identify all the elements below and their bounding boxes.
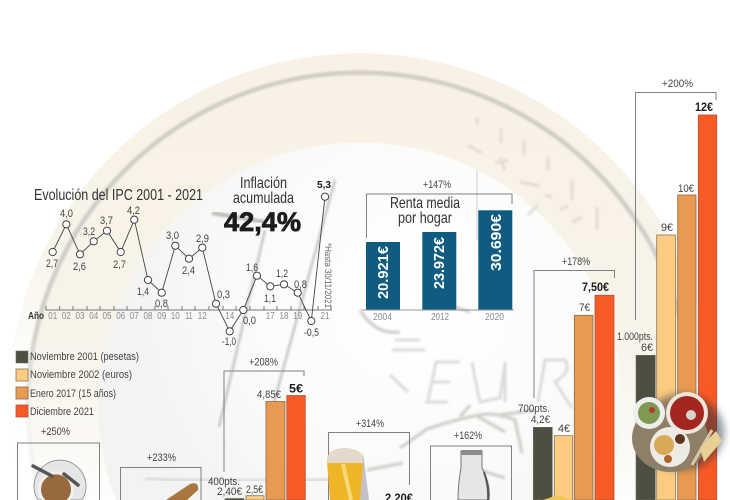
line chart: IPC: 1,1 [264, 293, 276, 305]
panel: bread [120, 452, 201, 500]
line chart: IPC [28, 179, 333, 348]
legend: Diciembre 2021 [30, 406, 94, 418]
panel: +178%: 4€ [558, 423, 570, 435]
coin engraving: EUR lettering [390, 340, 572, 408]
panel: milk bottle [430, 430, 512, 500]
panel: menu +208%: 400pts. [208, 476, 240, 488]
bar chart: Renta media por hogar: 20.921€ [376, 246, 392, 299]
line chart: IPC: *Hasta 30/11/2021 [322, 243, 333, 308]
line chart: IPC: 3,7 [100, 215, 113, 227]
bar chart: Renta media por hogar: por hogar [398, 210, 453, 227]
line chart: IPC: 07 [130, 311, 139, 322]
panel: +200%: 6€ [641, 342, 653, 354]
line chart: IPC: 2,6 [73, 261, 86, 273]
bar chart: Renta media por hogar: 2004 [373, 312, 392, 323]
line chart: IPC: 4,0 [60, 208, 73, 220]
line chart: IPC: 12 [198, 311, 207, 322]
line chart: IPC: 18 [280, 311, 289, 322]
line chart: IPC: 17 [266, 311, 275, 322]
panel: +200%: 9€ [661, 222, 673, 234]
line chart: IPC: 09 [157, 311, 167, 322]
bar chart: Renta media por hogar [362, 179, 514, 323]
heading: Evolución del IPC: Evolución del IPC 2001 - 2021 [34, 187, 203, 204]
panel: +178%: 4,2€ [531, 414, 550, 426]
panel: menu +208% [208, 356, 305, 500]
line chart: IPC: 21 [320, 311, 330, 322]
bar chart: Renta media por hogar: 2020 [485, 312, 504, 323]
line chart: IPC: 1,2 [276, 268, 288, 280]
panel: +178%: 7€ [579, 302, 590, 314]
icon: bottle [458, 450, 489, 500]
panel: bread: +233% [147, 452, 176, 464]
line chart: IPC: 14 [225, 311, 235, 322]
legend [16, 351, 139, 418]
line chart: IPC: 06 [116, 311, 126, 322]
legend: Noviembre 2001 (pesetas) [30, 351, 139, 363]
panel: +200%: 10€ [678, 183, 694, 195]
line chart: IPC: 2,4 [182, 265, 195, 277]
icon: cheese [543, 495, 573, 500]
line chart: IPC: 19 [293, 311, 303, 322]
line chart: IPC: 01 [48, 311, 58, 322]
panel: menu +208%: +208% [249, 356, 278, 368]
panel: coffee: +250% [41, 426, 70, 438]
line chart: IPC: -1,0 [222, 336, 236, 348]
line chart: IPC: 2,9 [196, 233, 209, 245]
line chart: IPC: 1,6 [246, 262, 258, 274]
panel: menu +208%: 4,85€ [257, 389, 281, 401]
coin engraving: map [360, 302, 535, 478]
panel: +178%: +178% [562, 256, 590, 268]
icon: plate of food [632, 392, 724, 472]
bar chart: Renta media por hogar: Renta media [390, 195, 460, 212]
line chart: IPC: 04 [89, 311, 99, 322]
line chart: IPC: 2,7 [46, 258, 58, 270]
line chart: IPC: 05 [102, 311, 112, 322]
panel: +200% [617, 78, 724, 500]
text block: Inflación acumulada: Inflación [240, 175, 287, 192]
panel: menu +208%: 5€ [289, 382, 303, 396]
line chart: IPC: 2,7 [113, 259, 126, 271]
panel: coffee [18, 426, 100, 500]
line chart: IPC: 10 [171, 311, 180, 322]
panel: menu +208%: 2,40€ [217, 486, 242, 498]
panel: +200%: 12€ [695, 100, 713, 114]
bar chart: Renta media por hogar: +147% [423, 179, 451, 191]
line chart: IPC: 0,3 [217, 289, 230, 301]
line chart: IPC: -0,5 [304, 327, 319, 339]
icon: baguette [166, 483, 198, 500]
bar chart: Renta media por hogar: 23.972€ [432, 237, 448, 289]
line chart: IPC: 0,8 [155, 298, 168, 310]
panel: +178%: 7,50€ [582, 280, 609, 294]
line chart: IPC: 5,3 [317, 179, 331, 191]
line chart: IPC: 4,2 [127, 205, 140, 217]
text block: Inflación acumulada: acumulada [233, 190, 294, 207]
legend: Enero 2017 (15 años) [30, 388, 116, 400]
panel: beer [327, 418, 413, 500]
bar chart: Renta media por hogar: 30.690€ [489, 214, 505, 271]
line chart: IPC: 1,4 [137, 286, 149, 298]
panel: +178% [518, 256, 614, 500]
panel: beer: +314% [356, 418, 384, 430]
icon: coffee cup [33, 460, 86, 500]
line chart: IPC: Año [28, 310, 44, 322]
line chart: IPC: 03 [76, 311, 85, 322]
icon: beer glass [327, 448, 369, 500]
legend: Noviembre 2002 (euros) [30, 369, 132, 381]
line chart: IPC: 0,8 [294, 279, 307, 291]
panel: +200%: +200% [662, 78, 693, 90]
line chart: IPC: 08 [144, 311, 153, 322]
bar chart: Renta media por hogar: 2012 [431, 312, 449, 323]
line chart: IPC: 11 [186, 311, 193, 322]
panel: menu +208%: 2,5€ [246, 484, 263, 496]
line chart: IPC: 0,0 [243, 315, 256, 327]
line chart: IPC: 3,0 [166, 230, 179, 242]
panel: milk bottle: +162% [454, 430, 482, 442]
text block: Inflación acumulada [224, 175, 301, 237]
line chart: IPC: 02 [62, 311, 71, 322]
panel: +200%: 1.000pts. [617, 331, 653, 343]
coin engraving: stars [468, 117, 597, 230]
line chart: IPC: 3,2 [83, 226, 95, 238]
panel: +178%: 700pts. [518, 403, 550, 415]
text block: Inflación acumulada: 42,4% [224, 207, 301, 237]
